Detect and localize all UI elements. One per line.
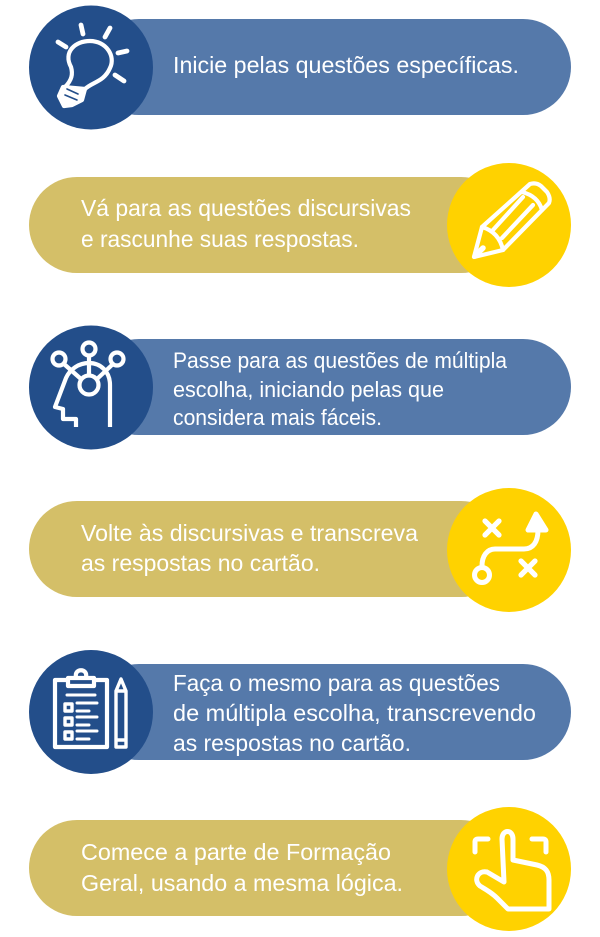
step 5 badge bbox=[29, 650, 153, 774]
icon: strategy path bbox=[474, 514, 546, 582]
icon: pencil bbox=[474, 183, 550, 257]
step 4 badge bbox=[447, 488, 571, 612]
step 6 bar bbox=[29, 820, 509, 916]
step 1 badge bbox=[29, 6, 153, 130]
step 3 panel bbox=[29, 326, 571, 450]
step 4 bar bbox=[29, 501, 509, 597]
step 3 bar bbox=[91, 339, 571, 435]
step 2 text: Vá para as questões discursivas bbox=[81, 195, 411, 221]
icon: clipboard and pencil bbox=[55, 670, 126, 747]
step 3 badge bbox=[29, 326, 153, 450]
step 6 panel bbox=[29, 807, 571, 931]
icon: head with nodes bbox=[52, 342, 124, 427]
step 3 text: escolha, iniciando pelas que bbox=[173, 377, 444, 402]
icon: touch gesture bbox=[475, 832, 549, 909]
step 6 text: Comece a parte de Formação bbox=[81, 839, 391, 865]
step 6 badge bbox=[447, 807, 571, 931]
step 4 text: Volte às discursivas e transcreva bbox=[81, 520, 418, 546]
step 5 panel bbox=[29, 650, 571, 774]
step 3 text: Passe para as questões de múltipla bbox=[173, 348, 508, 373]
icon: light bulb bbox=[58, 25, 127, 106]
step 5 bar bbox=[91, 664, 571, 760]
step 3 text: considera mais fáceis. bbox=[173, 405, 382, 430]
step 2 panel bbox=[29, 163, 571, 287]
step 2 badge bbox=[447, 163, 571, 287]
step 5 text: as respostas no cartão. bbox=[173, 730, 411, 756]
step 5 text: Faça o mesmo para as questões bbox=[173, 670, 500, 696]
step 1 bar bbox=[91, 19, 571, 115]
step 4 text: as respostas no cartão. bbox=[81, 550, 320, 576]
step 6 text: Geral, usando a mesma lógica. bbox=[81, 870, 403, 896]
step 2 text: e rascunhe suas respostas. bbox=[81, 226, 359, 252]
step 4 panel bbox=[29, 488, 571, 612]
step 5 text: de múltipla escolha, transcrevendo bbox=[173, 700, 536, 726]
step 1 panel bbox=[29, 6, 571, 130]
step 1 text: Inicie pelas questões específicas. bbox=[173, 52, 519, 78]
step 2 bar bbox=[29, 177, 509, 273]
